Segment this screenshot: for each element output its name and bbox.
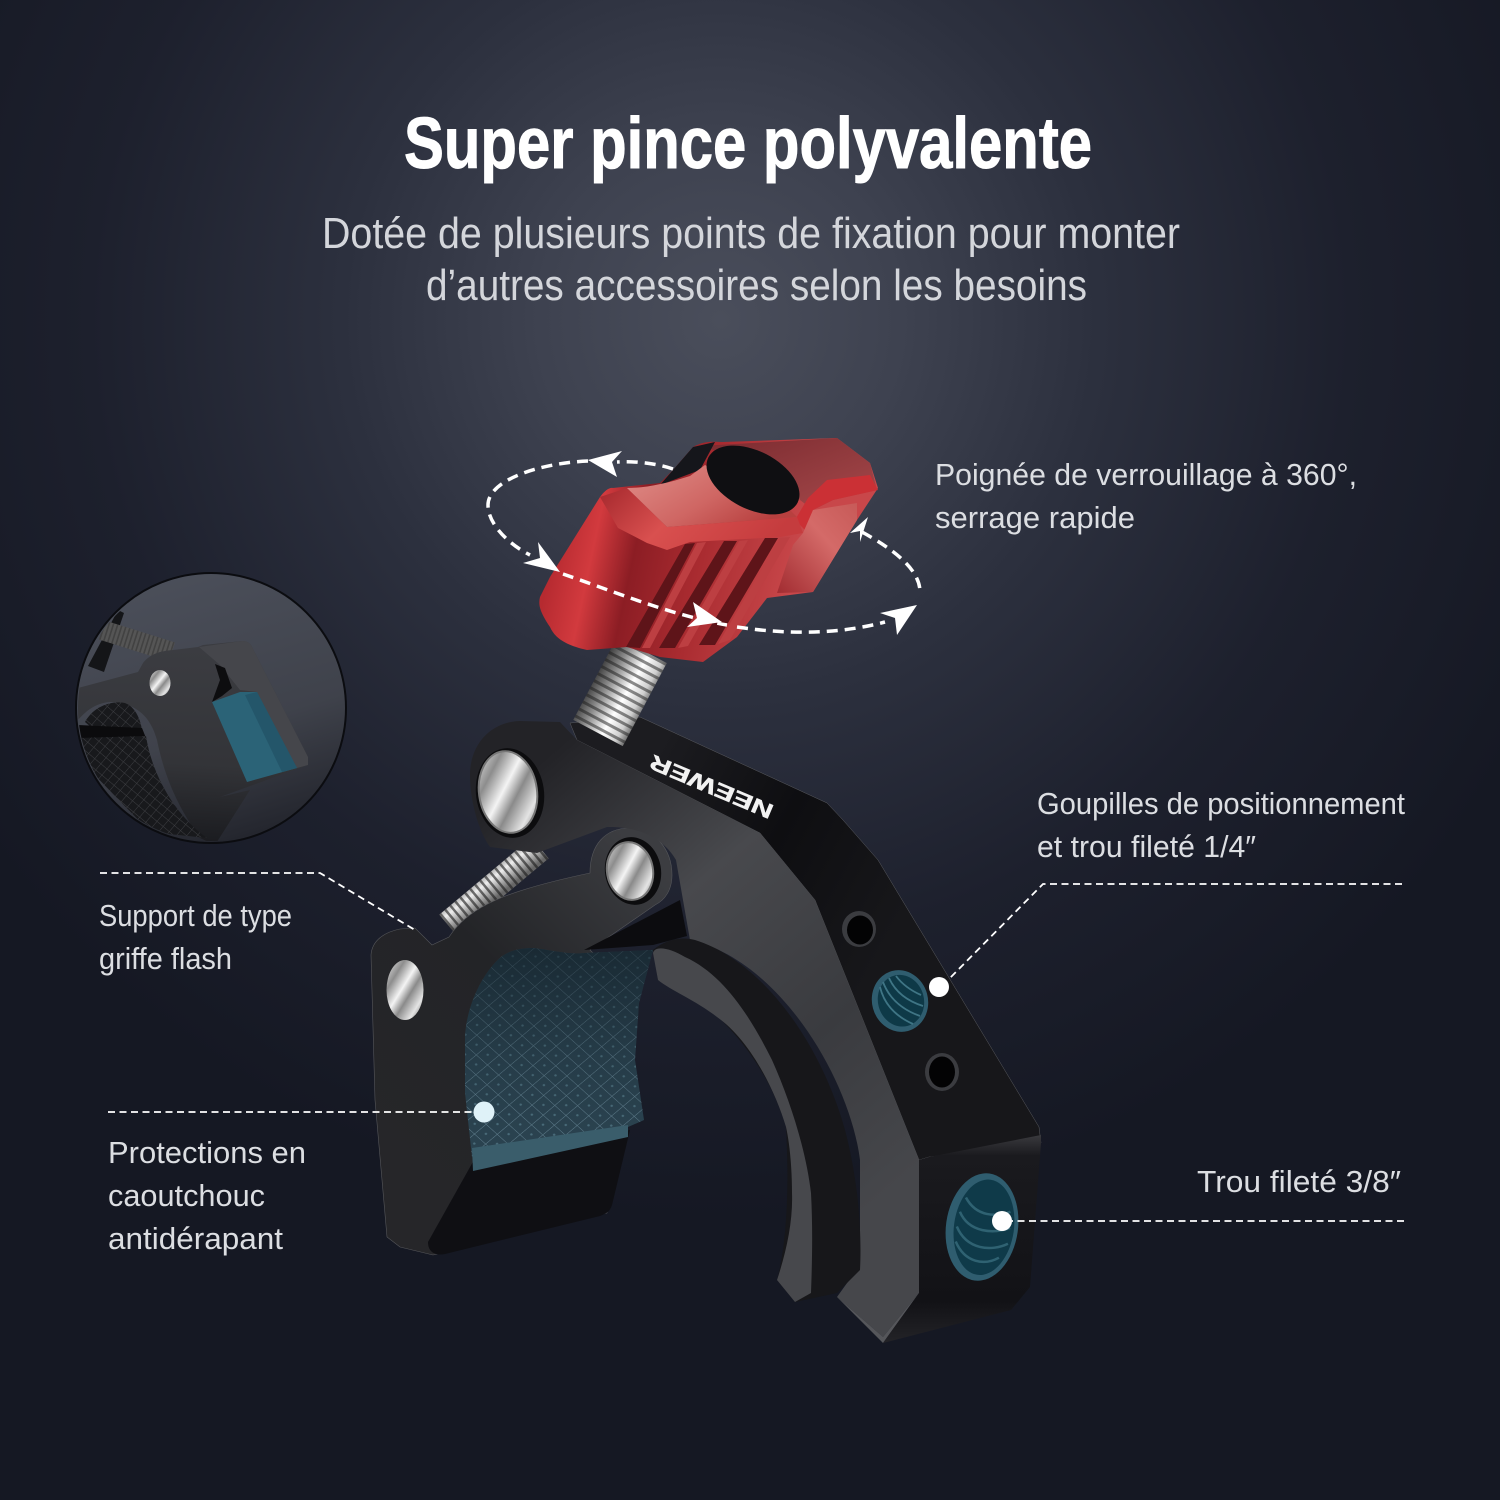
pin: jaw [386, 960, 424, 1020]
dashed path: right [862, 532, 920, 592]
positioning pin hole bottom [925, 1053, 959, 1091]
dashed path: upper left [488, 461, 673, 555]
positioning pin hole top [842, 911, 876, 947]
callout: locking handle [935, 457, 1357, 535]
subtitle [322, 209, 1180, 310]
pin: link [600, 833, 666, 909]
callout: 3/8 hole: Trou fileté 3/8″ [1197, 1164, 1401, 1199]
side face of arm [570, 717, 1041, 1160]
end face [883, 1135, 1041, 1343]
chamfer [600, 488, 803, 550]
bottom tip edge [837, 1293, 919, 1343]
clamp [371, 650, 1041, 1343]
subtitle: d’autres accessoires selon les besoins [426, 261, 1087, 310]
knob silhouette [539, 438, 878, 662]
1/4 threaded hole [865, 964, 935, 1038]
callout: claw mount: griffe flash [99, 941, 232, 976]
arrowheads [523, 451, 917, 635]
rotation arrows [488, 461, 920, 632]
callout: rubber pads: caoutchouc [108, 1178, 265, 1213]
callout: claw mount: Support de type [99, 898, 292, 933]
callout: claw mount [99, 873, 415, 976]
grooves [626, 543, 695, 648]
black wedge under link [584, 900, 687, 950]
title: Super pince polyvalente [404, 104, 1092, 184]
3/8 threaded hole [939, 1169, 1025, 1285]
top light face [627, 465, 797, 527]
callout: rubber pads [108, 1102, 494, 1256]
inner grey band [653, 948, 812, 1302]
subtitle: Dotée de plusieurs points de fixation pour monter [322, 209, 1180, 258]
black oval [695, 431, 811, 529]
brand logo: NEEWER [646, 750, 777, 823]
callout: positioning pins [929, 786, 1405, 997]
red locking knob [539, 431, 878, 662]
callout: locking handle: serrage rapide [935, 500, 1135, 535]
infographic canvas [75, 0, 1405, 1343]
pin: upper arm [470, 744, 550, 842]
callout: positioning pins: Goupilles de positionnement [1037, 786, 1405, 821]
dashed path: lower right [737, 622, 885, 632]
callout: 3/8 hole [992, 1164, 1404, 1231]
callout: positioning pins: et trou fileté 1/4″ [1037, 829, 1256, 864]
upper screw [598, 650, 642, 733]
left jaw body [371, 828, 672, 1255]
notch shadow [660, 442, 715, 485]
inner black ring [653, 938, 860, 1302]
back top face [700, 438, 877, 510]
callout: locking handle: Poignée de verrouillage à 360°, [935, 457, 1357, 492]
arm outer grey face [470, 721, 919, 1337]
dashed path: front [563, 574, 727, 625]
jaw front face [428, 1130, 630, 1254]
inset: claw mount detail [76, 573, 346, 845]
right flank [777, 503, 857, 593]
groove highlights [642, 542, 706, 648]
bright band [795, 475, 878, 530]
rubber pad [465, 948, 653, 1171]
callout: rubber pads: antidérapant [108, 1221, 283, 1256]
lower screw [448, 848, 540, 925]
callout: rubber pads: Protections en [108, 1135, 306, 1170]
